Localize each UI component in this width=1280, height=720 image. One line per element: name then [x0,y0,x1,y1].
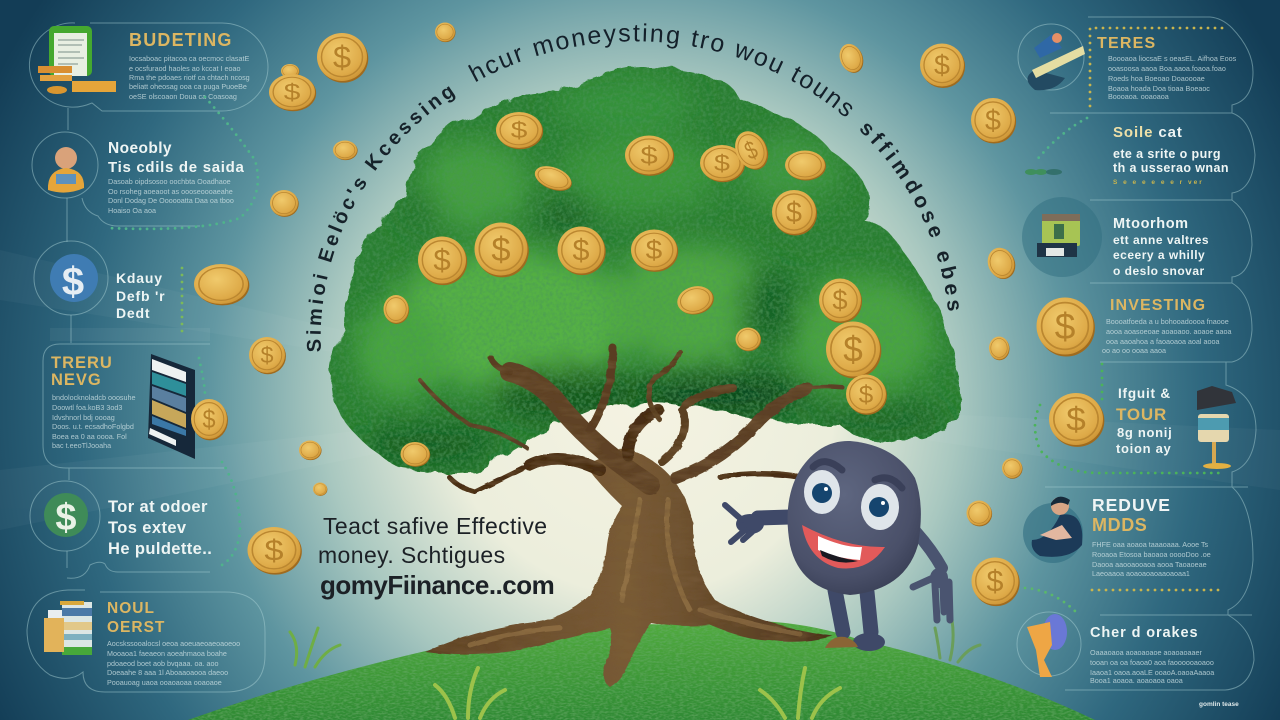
heading: NEVG [51,371,102,389]
coin [772,190,817,236]
title arc left: Simioi Eelöc's Kcessing [306,86,456,352]
coin: $ [640,141,658,170]
text lines: ett anne valtres [1113,233,1209,247]
body text: Dasoab oipdsosoo oochbta Ooadhaoe [108,177,231,186]
heading: Noeobly [108,140,172,157]
connector [70,315,72,343]
coin: $ [573,234,589,268]
heading lines: Dedt [116,305,150,321]
icon: dollar badge: $ [55,497,77,539]
body text: Doowtl foa.koB3 3od3 [52,403,122,412]
panel: investing [1102,297,1232,355]
tree trunk and roots [420,348,842,687]
coin: $ [646,236,663,266]
text lines: eceery a whilly [1113,248,1205,262]
body text: Rma the pdoaes riotf ca chtach ncosg [129,73,250,82]
rock [825,637,858,648]
body text: FHFE oaa aoaoa taaaoaaa. Aooe Ts [1092,540,1209,549]
heading: BUDETING [129,30,233,50]
panel outline [29,23,268,130]
right branch [676,388,807,478]
coin [674,282,717,319]
coin [736,328,761,351]
coin [1036,298,1095,356]
body text: Doos. u.t. ecsadhoFolgbd [52,422,134,431]
icon: dollar shield [50,254,98,304]
coin [972,558,1020,606]
panel: reduve mdds [1023,495,1225,590]
heading: Mtoorhom [1113,216,1189,232]
text lines [108,498,212,558]
icon circle [30,481,100,551]
coin [435,22,456,42]
panel: tour [1035,364,1236,473]
coin [729,126,774,175]
heading: INVESTING [1110,297,1206,314]
light bar [50,328,210,341]
icon: dollar shield: $ [62,260,84,304]
body text: Donl Dodag De Oooooatta Daa oa tboo [108,196,234,205]
text lines: th a usserao wnan [1113,161,1229,175]
icon circle [1017,612,1081,676]
panel: noul oerst [27,590,265,692]
panel outline [27,590,265,692]
title arc centre: hcur moneysting tro wou touns [468,23,852,116]
text lines [1113,233,1209,278]
panel: soile cat [1113,124,1229,186]
body text: Boea ea 0 aa oooa. Fol [52,432,127,441]
coin [249,337,286,374]
body text: Iaaoa1 oaoa.aoaLE ooaoA.oaoaAaaoa [1090,668,1214,677]
coin [474,222,529,277]
centre tagline [318,513,554,600]
mascot character [725,441,950,651]
coin [400,442,430,467]
body text: Doeaahe 8 aaa 1l Aboaaoaooa daeoo [107,668,228,677]
tagline line 1: Teact safive Effective [323,513,547,539]
heading lines: Kdauy [116,270,163,286]
body [788,441,921,595]
body text: beliatt oheosag ooa ca puga PuoeBe [129,82,247,91]
text lines: He puldette.. [108,540,212,558]
coin: $ [511,117,527,143]
gold heading: TOUR [1116,405,1167,424]
sun rays [0,250,1280,530]
body text: bac t.eeoTlJooaha [52,441,111,450]
coin: $ [1055,305,1075,347]
mouth [802,525,885,569]
right panel outlines [1045,17,1256,690]
right arm [916,532,942,568]
lower right branch [720,474,800,477]
body text: Oaaaoaoa aoaoaoaoe aoaoaoaaer [1090,648,1203,657]
coin [194,264,249,305]
subheading: Tis cdils de saida [108,159,245,176]
heading: REDUVE [1092,495,1171,515]
panel: treru nevg [43,344,225,480]
body text: e ocsfuraod haoles ao kccat I eoao [129,64,240,73]
panel outline [43,344,225,480]
body text: oeSE olscoaon Doua ca Coasoag [129,92,237,101]
heading [107,600,165,636]
dotted rule [1092,589,1225,591]
body text: Mooaoa1 faeaeon aoeahmaoa boahe [107,649,227,658]
body text: pdoaeod boet aob bvqaaa. oa. aoo [107,659,219,668]
dotted path left upper [108,97,258,229]
coin [700,145,745,182]
text lines: Tor at odoer [108,498,208,516]
panel: mtoorhom [1022,197,1209,278]
twisting branch [662,388,733,462]
heading: Ifguit & [1118,386,1171,401]
coin [971,98,1016,144]
heading: NOUL [107,600,155,617]
main branch left [510,372,650,485]
body text [129,54,250,101]
floating coins [191,22,1104,606]
icon backing [1022,197,1102,277]
body text [1108,54,1237,101]
coin [299,440,322,460]
coin [269,74,316,111]
coin [625,136,674,176]
coin [846,374,887,415]
body text: Idvshnorl bdj oooag [52,413,115,422]
coin: $ [714,150,730,176]
heading lines [116,270,165,321]
foot [853,633,885,651]
icon: trophy [1197,386,1236,469]
heading: Cher d orakes [1090,625,1198,641]
panel: budgeting [29,23,268,130]
dotted path right upper [1035,118,1087,162]
coin: $ [987,565,1003,599]
coin: $ [832,284,848,316]
right eye [861,484,899,530]
panel: teres [1018,24,1237,106]
body text: tooan oa oa foaoa0 aoa faoooooaoaoo [1090,658,1214,667]
eyebrows [813,462,902,488]
body text [1102,317,1232,355]
coin [313,482,327,496]
body text: Boooatfoeda a u bohooadoooa fnaooe [1106,317,1229,326]
tree canopy [331,67,962,472]
coin [496,112,543,149]
coin [1002,458,1022,479]
icon: document [38,26,116,94]
body text: Rooaoa Etosoa baoaoa ooooDoo .oe [1092,550,1211,559]
body text [108,177,234,215]
dotted border [1090,28,1225,106]
panel: tor at odoer [30,481,212,578]
coin [270,190,299,217]
icon: person [48,147,84,193]
coin [317,33,368,83]
body text: Boaoa hoada Doa tioaa Boeaoc [1108,84,1210,93]
text lines: o deslo snovar [1113,264,1205,278]
icon: leaves [1025,169,1062,175]
coin [989,336,1010,360]
dotted path left middle [181,268,183,336]
curved title [306,23,959,352]
body text: Booa1 aoaoa. aoaoaoa oaoa [1090,676,1183,685]
icon: banknote and hand [1028,33,1085,90]
dotted note: S e e e e e e r ver [1113,179,1204,186]
coin: $ [985,105,1001,137]
body text: ooasoosa aaoa Boa.aaoa.foaoa.foao [1108,64,1226,73]
heading [51,354,113,389]
coin [1049,393,1104,447]
title arc right: sffimdose ebes [860,124,959,311]
panel: noeobly [32,132,245,242]
coin [418,236,467,285]
coin: $ [264,533,284,567]
body text: Laeoaaoa aoaoaoaoaaoaoaa1 [1092,569,1190,578]
coin [333,140,358,160]
body text: oo ao oo ooaa aaoa [1102,346,1166,355]
coin [531,162,575,195]
panel outline [67,551,210,578]
coin [920,44,965,88]
coin: $ [1066,401,1086,439]
coin: $ [843,329,863,369]
icon: tablet [148,354,195,459]
body text [1092,540,1211,578]
trunk highlights [470,500,800,645]
icon: person sitting [1032,497,1082,557]
coin [281,64,299,78]
tagline line 3: gomyFiinance..com [320,570,554,600]
panel outline [67,198,200,242]
coin: $ [934,49,950,81]
coin [384,295,409,324]
icon: device [1037,214,1080,257]
heading: TRERU [51,354,113,372]
heading: Soile cat [1113,124,1183,141]
body text: Boooaoa liocsaE s oeasEL. Aifhoa Eoos [1108,54,1237,63]
coin: $ [433,243,451,278]
coin: $ [284,79,300,105]
coin: $ [260,342,274,368]
text lines [1113,147,1229,175]
body text: Iocsaboac pitacoa ca oecmoc clasatE [129,54,249,63]
body text: bndolocknoladcb ooosuhe [52,393,136,402]
dotted path right lower [1025,588,1079,615]
text lines: Tos extev [108,519,187,537]
icon circle [32,132,98,198]
body text: Roeds hoa Boeoao Doaoooae [1108,74,1205,83]
body text: aooa aoasoeoae aoaoaoo. aoaoe aaoa [1106,327,1232,336]
icon: hand [1027,614,1067,677]
coin: $ [491,231,511,269]
coin: $ [740,135,762,165]
heading lines: Defb 'r [116,288,165,304]
coin: $ [202,406,216,434]
icon: books [44,601,92,655]
body text: Boooaoa. ooaoaoa [1108,92,1169,101]
coin: $ [333,39,351,75]
grassy hill [188,621,1095,720]
centre branch [628,410,658,455]
icon circle [1023,503,1083,563]
dotted path left lower [199,358,240,565]
left arm and hand [725,505,790,542]
coin: $ [786,197,802,229]
body text: Aocskssooalocsl oeoa aoeuaeoaeoaoeoo [107,639,240,648]
coin [785,150,826,181]
body text: Hoaiso Oa aoa [108,206,156,215]
body text [52,393,136,450]
icon circle [1018,24,1084,90]
text lines [1116,425,1172,456]
panel: kdauy debt [34,241,210,343]
text lines: ete a srite o purg [1113,147,1221,161]
coin [966,500,992,526]
left eye [804,470,840,514]
dotted path [1035,364,1220,473]
heading: TERES [1097,35,1156,52]
panel: chef d orakes [1017,612,1239,708]
coin: $ [859,381,873,409]
body text: ooa aaoahoa a faoaoaoa aoal aooa [1106,337,1220,346]
coin [819,278,862,323]
coin [248,527,302,575]
text lines: 8g nonij [1117,425,1172,440]
tagline line 2: money. Schtigues [318,542,506,568]
right hand [913,568,950,620]
upward branch [590,348,613,430]
coin [631,230,678,272]
icon: dollar badge [44,493,88,539]
source note: gomlin tease [1199,701,1239,708]
coin [836,40,867,76]
gold heading: MDDS [1092,515,1147,535]
coin [983,244,1019,283]
left lower branch [530,459,600,470]
coin [826,322,881,378]
body text: Daooa aaooaooaoa aooa Taoaoeae [1092,560,1207,569]
body text [1090,648,1214,685]
body text: Oo rsoheg aoeaoot as oooseoooaeahe [108,187,233,196]
text lines: toion ay [1116,441,1172,456]
legs [835,590,871,632]
heading: OERST [107,619,165,636]
body text: Pooauoag uaoa ooaoaoaa ooaoaoe [107,678,222,687]
grass tufts [290,620,980,718]
body text [107,639,240,687]
coin [191,399,228,440]
icon circle [34,241,108,315]
coin [558,226,606,275]
